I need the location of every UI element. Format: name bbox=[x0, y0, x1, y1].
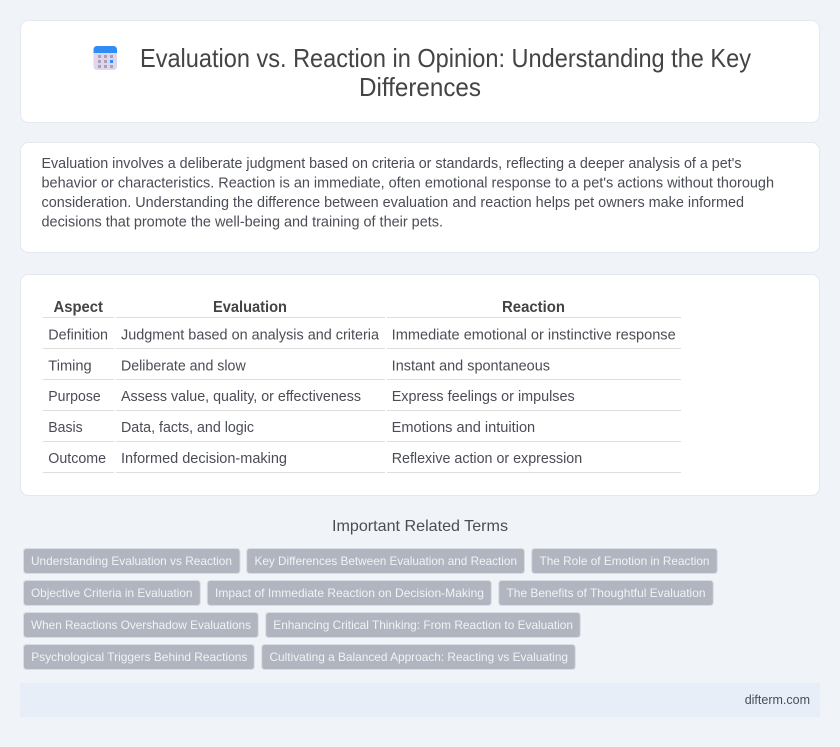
panel: header bbox=[20, 20, 820, 122]
tag bbox=[262, 644, 575, 670]
footer bbox=[20, 683, 820, 717]
tag bbox=[24, 548, 240, 574]
tag bbox=[532, 548, 717, 574]
title bbox=[140, 45, 751, 102]
tag: The Role of Emotion in Reaction bbox=[540, 554, 710, 568]
row: timing: Timing bbox=[48, 358, 92, 374]
tag: Impact of Immediate Reaction on Decision-Making bbox=[215, 586, 484, 600]
tag bbox=[24, 612, 258, 638]
row: outcome bbox=[43, 451, 681, 472]
tag: Key Differences Between Evaluation and Reaction bbox=[254, 554, 517, 568]
tag bbox=[24, 580, 200, 606]
title: Differences bbox=[359, 74, 481, 102]
footer: difterm.com bbox=[745, 692, 810, 707]
heading: important related terms: Important Related Terms bbox=[332, 518, 508, 535]
table header: Reaction bbox=[502, 299, 565, 316]
row: purpose: Assess value, quality, or effectiveness bbox=[121, 389, 361, 405]
tag bbox=[24, 644, 254, 670]
tag: Psychological Triggers Behind Reactions bbox=[31, 650, 247, 664]
table header bbox=[43, 299, 681, 318]
intro text: behavior or characteristics. Reaction is an immediate, often emotional response to a pet's actions without thorough bbox=[42, 176, 774, 192]
tag bbox=[499, 580, 713, 606]
row: purpose: Purpose bbox=[48, 389, 101, 405]
panel: introduction bbox=[20, 142, 820, 252]
tag: The Benefits of Thoughtful Evaluation bbox=[506, 586, 706, 600]
row: outcome: Informed decision-making bbox=[121, 451, 287, 467]
panel: comparison table bbox=[20, 274, 820, 496]
row: basis: Basis bbox=[48, 420, 83, 436]
intro text: Evaluation involves a deliberate judgment based on criteria or standards, reflecting a deeper analysis of a pet's bbox=[42, 156, 742, 172]
tag: Understanding Evaluation vs Reaction bbox=[31, 554, 232, 568]
row: purpose: Express feelings or impulses bbox=[392, 389, 575, 405]
row: outcome: Reflexive action or expression bbox=[392, 451, 582, 467]
tag: Cultivating a Balanced Approach: Reacting vs Evaluating bbox=[270, 650, 568, 664]
intro text: decisions that promote the well-being and training of their pets. bbox=[42, 214, 443, 230]
row: timing: Instant and spontaneous bbox=[392, 358, 550, 374]
tag: When Reactions Overshadow Evaluations bbox=[31, 618, 251, 632]
row: timing bbox=[43, 358, 681, 380]
title: Evaluation vs. Reaction in Opinion: Understanding the Key bbox=[140, 45, 751, 73]
table header: Evaluation bbox=[213, 299, 287, 316]
tag bbox=[247, 548, 524, 574]
intro text: consideration. Understanding the difference between evaluation and reaction helps pet owners make informed bbox=[42, 195, 744, 211]
row: purpose bbox=[43, 389, 681, 410]
tag: Enhancing Critical Thinking: From Reaction to Evaluation bbox=[273, 618, 573, 632]
icon: calendar bbox=[94, 46, 117, 70]
table header: Aspect bbox=[54, 299, 104, 316]
row: definition bbox=[43, 328, 681, 348]
row: definition: Judgment based on analysis and criteria bbox=[121, 328, 379, 344]
tag: Objective Criteria in Evaluation bbox=[31, 586, 192, 600]
row: basis: Data, facts, and logic bbox=[121, 420, 254, 436]
row: definition: Immediate emotional or instinctive response bbox=[392, 328, 676, 344]
intro text bbox=[42, 156, 774, 230]
tag bbox=[207, 580, 491, 606]
row: outcome: Outcome bbox=[48, 451, 106, 467]
related term tags bbox=[24, 548, 717, 670]
tag bbox=[266, 612, 580, 638]
row: timing: Deliberate and slow bbox=[121, 358, 246, 374]
row: definition: Definition bbox=[48, 328, 108, 344]
row: basis: Emotions and intuition bbox=[392, 420, 535, 436]
row: basis bbox=[43, 420, 681, 442]
